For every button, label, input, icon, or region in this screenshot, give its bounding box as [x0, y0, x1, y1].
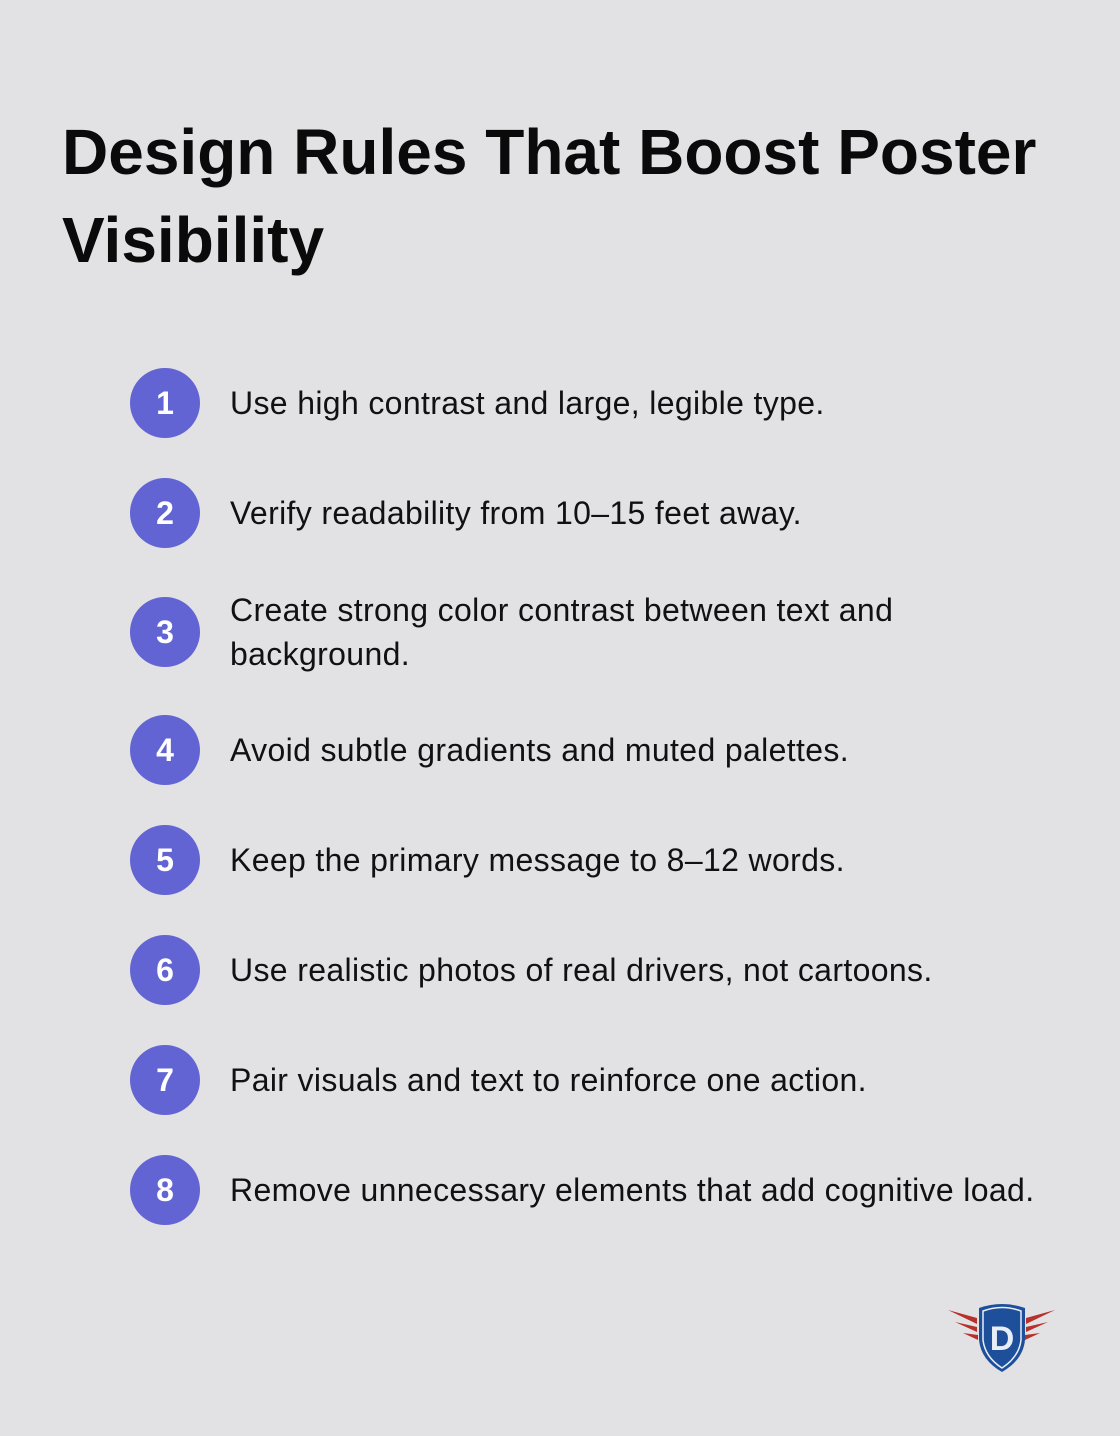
- item 2: [130, 478, 802, 548]
- item 3: 3: [156, 614, 174, 650]
- item 5: [130, 825, 845, 895]
- item 6: Use realistic photos of real drivers, not cartoons.: [230, 952, 933, 988]
- item 7: Pair visuals and text to reinforce one action.: [230, 1062, 867, 1098]
- item 6: [130, 935, 933, 1005]
- item 7: [130, 1045, 867, 1115]
- item 7: 7: [156, 1062, 174, 1098]
- item 5: 5: [156, 842, 174, 878]
- item 8: 8: [156, 1172, 174, 1208]
- item 2: 2: [156, 495, 174, 531]
- item 2: Verify readability from 10–15 feet away.: [230, 495, 802, 531]
- item 6: 6: [156, 952, 174, 988]
- item 8: [130, 1155, 1034, 1225]
- item 1: 1: [156, 385, 174, 421]
- item 5: Keep the primary message to 8–12 words.: [230, 842, 845, 878]
- item 1: [130, 368, 825, 438]
- item 3: Create strong color contrast between text and: [230, 592, 893, 628]
- title: Design Rules That Boost Poster Visibility: [62, 116, 1036, 276]
- item 4: 4: [156, 732, 174, 768]
- item 4: Avoid subtle gradients and muted palettes.: [230, 732, 849, 768]
- icon: logo: [948, 1304, 1055, 1372]
- item 4: [130, 715, 849, 785]
- item 3: [130, 592, 893, 672]
- icon: logo: D: [990, 1320, 1014, 1358]
- item 3: background.: [230, 636, 410, 672]
- item 1: Use high contrast and large, legible type.: [230, 385, 825, 421]
- item 8: Remove unnecessary elements that add cognitive load.: [230, 1172, 1034, 1208]
